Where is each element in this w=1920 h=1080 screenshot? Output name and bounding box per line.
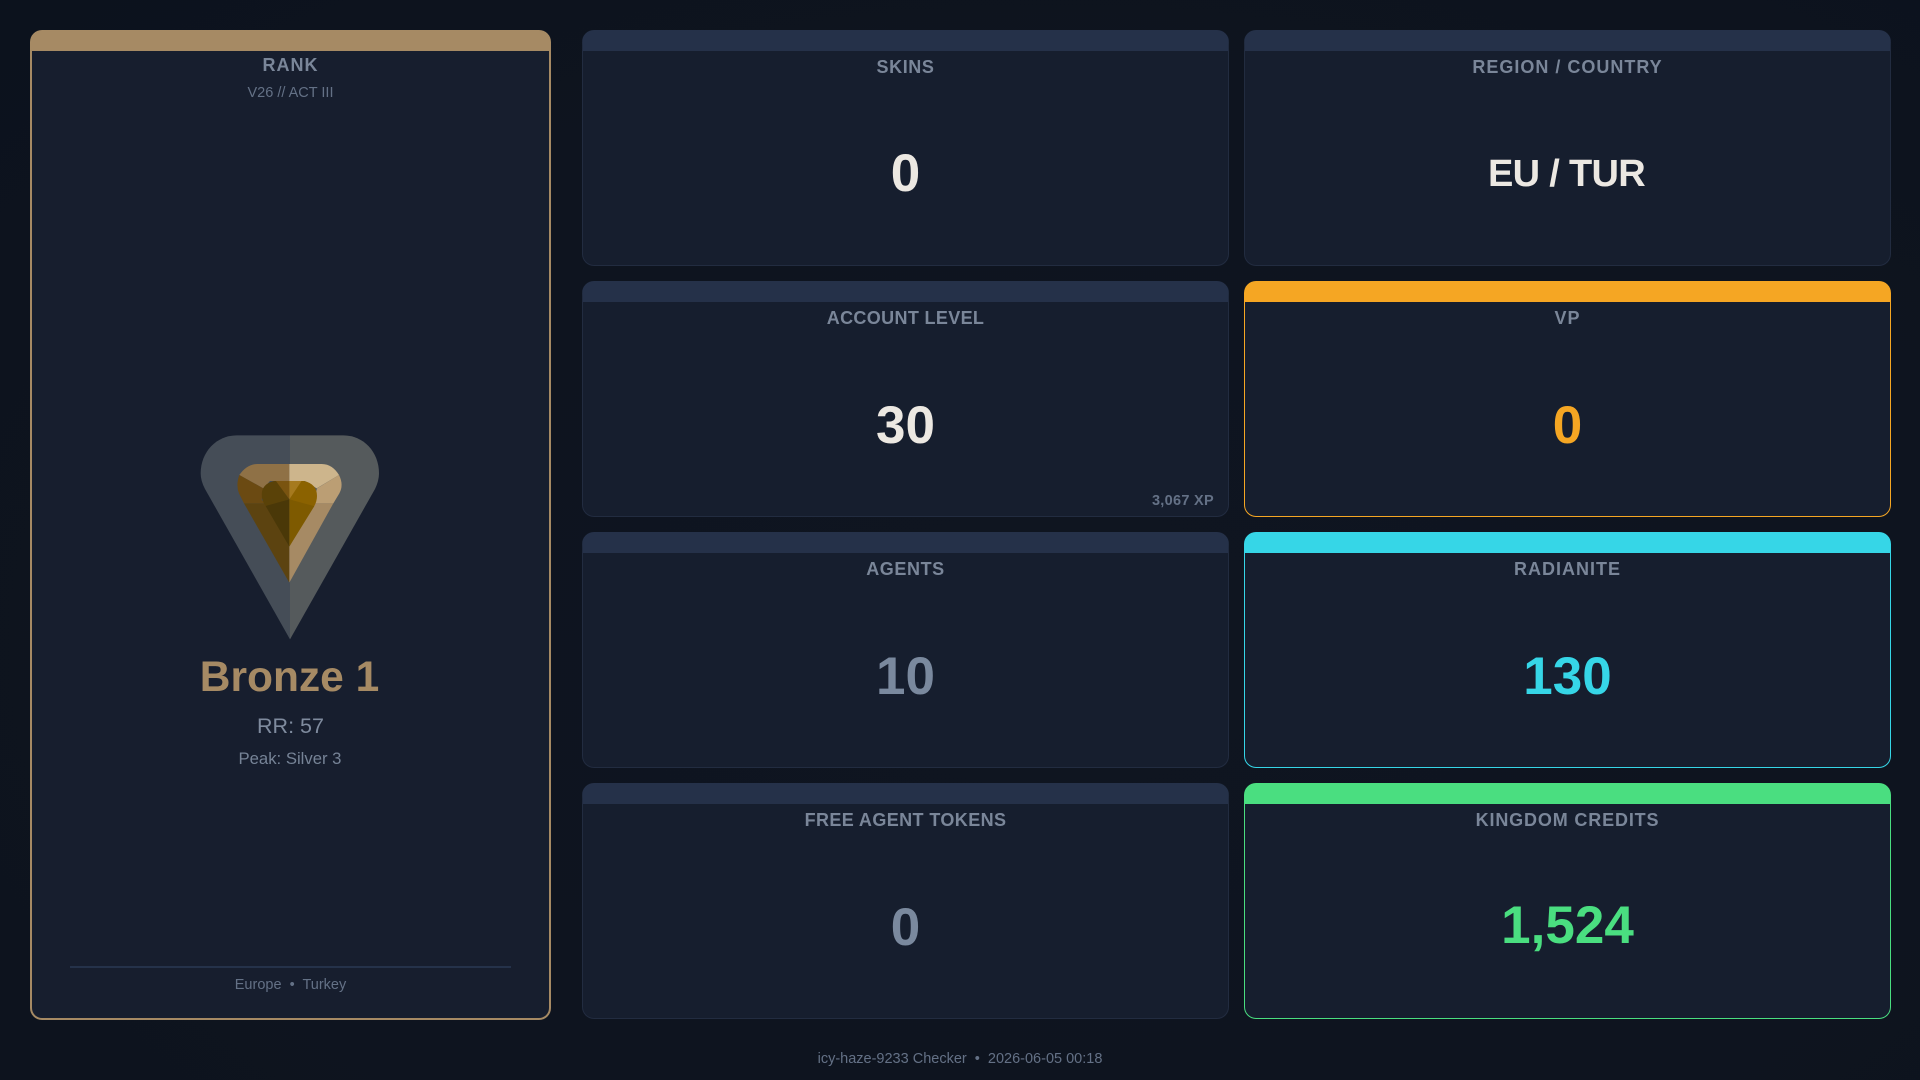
label: FREE AGENT TOKENS (805, 810, 1006, 830)
divider (70, 966, 511, 968)
label: KINGDOM CREDITS (1476, 810, 1659, 830)
label: REGION / COUNTRY (1472, 57, 1663, 77)
footer: icy-haze-9233 Checker • 2026-06-05 00:18 (818, 1051, 1102, 1067)
card: vp (1244, 281, 1891, 517)
card: free agent tokens (582, 783, 1229, 1019)
value: 1,524 (1501, 896, 1634, 955)
card: region (1244, 30, 1891, 266)
text: rank rating: RR: 57 (257, 714, 324, 738)
label: VP (1554, 308, 1580, 328)
heading: rank: RANK (262, 55, 318, 75)
text: rank name: Bronze 1 (200, 654, 379, 701)
card: skins (582, 30, 1229, 266)
card: radianite (1244, 532, 1891, 768)
label: RADIANITE (1514, 559, 1621, 579)
label: AGENTS (866, 559, 945, 579)
label: ACCOUNT LEVEL (827, 308, 984, 328)
value: EU / TUR (1488, 153, 1645, 195)
text: peak rank: Peak: Silver 3 (239, 749, 341, 768)
card: account level (582, 281, 1229, 517)
icon: bronze rank emblem (200, 435, 379, 640)
label: SKINS (876, 57, 934, 77)
text: location: Europe • Turkey (235, 977, 346, 993)
value: 0 (891, 144, 920, 203)
value: 30 (876, 396, 935, 455)
value: 10 (876, 647, 935, 706)
value: 0 (891, 898, 920, 957)
text: xp: 3,067 XP (1152, 493, 1214, 509)
value: 0 (1553, 396, 1582, 455)
card: kingdom credits (1244, 783, 1891, 1019)
text: act label: V26 // ACT III (248, 85, 333, 101)
value: 130 (1523, 647, 1612, 706)
card: agents (582, 532, 1229, 768)
panel: rank (30, 30, 551, 1020)
